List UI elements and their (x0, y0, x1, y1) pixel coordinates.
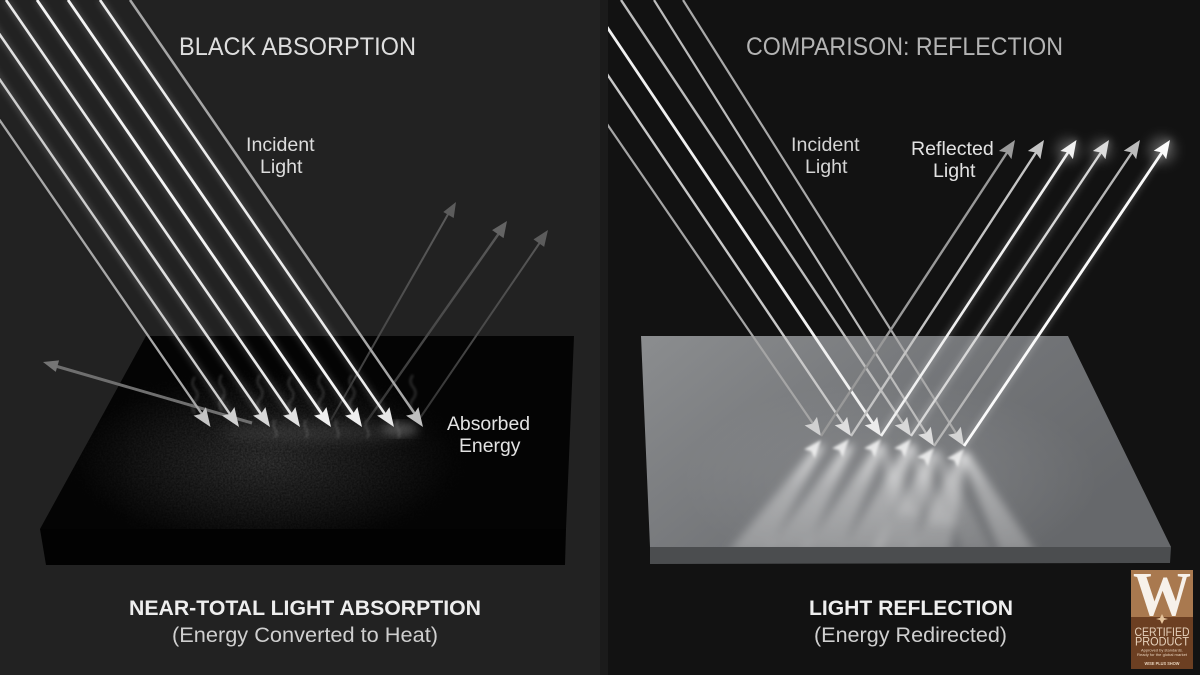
caption: energy redirected: (Energy Redirected) (814, 624, 1007, 647)
panel: black absorption background (0, 0, 600, 675)
label: incident light (left): Light (260, 156, 303, 178)
label: absorbed energy: Absorbed (447, 413, 530, 435)
badge: certified product (1131, 561, 1193, 669)
label: incident light (right): Incident (791, 134, 860, 156)
black slab (40, 336, 574, 565)
reflected light arrows (821, 136, 1176, 446)
label: absorbed energy: Energy (459, 435, 521, 457)
caption: near-total light absorption: NEAR-TOTAL LIGHT ABSORPTION (129, 597, 481, 620)
heading: black absorption: BLACK ABSORPTION (179, 33, 416, 61)
label: reflected light: Reflected (911, 138, 994, 160)
panel: reflection diagram (607, 0, 1176, 580)
panel: panel divider (600, 0, 608, 675)
badge: certified product: Ready for the global market (1137, 652, 1188, 657)
heading: comparison reflection: COMPARISON: REFLECTION (746, 33, 1063, 61)
badge: certified product: PRODUCT (1135, 636, 1189, 648)
label: incident light (right): Light (805, 156, 848, 178)
mirrored arrowheads (804, 438, 965, 467)
incident light arrows (607, 0, 970, 450)
badge: certified product: WISE PLUS SHOW (1144, 661, 1180, 666)
reflected light glow (881, 140, 1170, 446)
panel: reflection background (608, 0, 1200, 675)
caption: energy converted to heat: (Energy Converted to Heat) (172, 624, 438, 647)
reflected arrowhead halos (1057, 137, 1175, 163)
label: reflected light: Light (933, 160, 976, 182)
incident light glow (0, 0, 387, 417)
label: incident light (left): Incident (246, 134, 315, 156)
caption: light reflection: LIGHT REFLECTION (809, 597, 1013, 620)
absorbed energy glow on surface (102, 384, 432, 529)
badge: certified product: W (1133, 561, 1191, 629)
faint scattered arrows (331, 199, 553, 424)
heat waves rising from surface (192, 375, 416, 438)
panel: black absorption diagram (0, 0, 574, 565)
surface light reflections (730, 430, 1036, 547)
scattered arrow to the left (41, 356, 252, 423)
reflective slab (641, 336, 1171, 564)
badge: certified product: CERTIFIED (1134, 627, 1190, 639)
incident light arrows (0, 0, 429, 431)
badge: certified product: Approved by standards. (1141, 648, 1183, 652)
